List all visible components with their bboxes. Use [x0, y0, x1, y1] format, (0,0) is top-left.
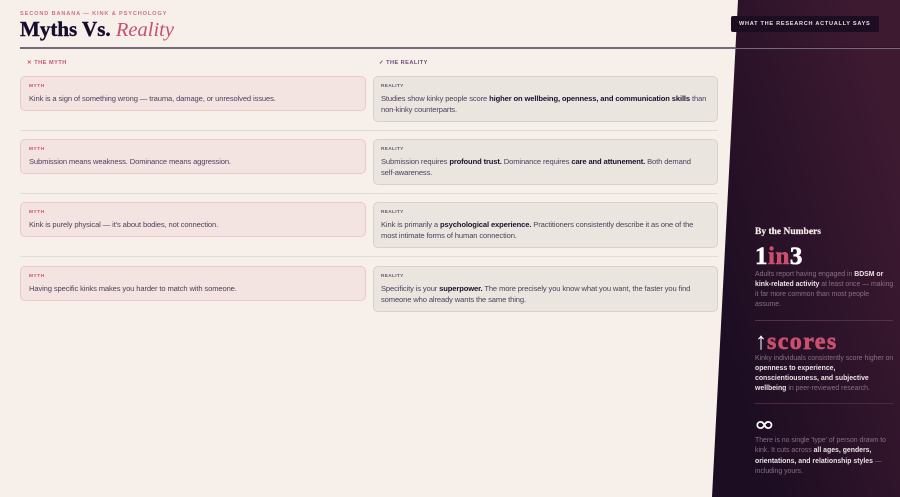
stat text 1: it far more common than most people: [755, 291, 869, 298]
myth card 4: Having specific kinks makes you harder to match with someone.: [29, 284, 237, 293]
header rule: [20, 47, 900, 49]
reality card 4: REALITY: [381, 274, 404, 279]
column header: myth: ✕ THE MYTH: [27, 60, 67, 66]
eyebrow: SECOND BANANA — KINK & PSYCHOLOGY: [20, 11, 167, 17]
stat text 1: kink-related activity at least once — making: [755, 281, 893, 288]
myth card 2: MYTH: [29, 147, 45, 152]
stat text 2: openness to experience,: [755, 365, 835, 372]
reality card 2: REALITY: [381, 147, 404, 152]
myth card 2: Submission means weakness. Dominance means aggression.: [29, 157, 231, 166]
stat: 1 in 3: 1in3: [755, 243, 803, 270]
stat text 2: conscientiousness, and subjective: [755, 375, 869, 382]
stat text 2: Kinky individuals consistently score higher on: [755, 354, 893, 362]
stat: infinity: ∞: [754, 412, 775, 436]
myth card 2: [20, 139, 366, 174]
title: Myths Vs. Reality: [20, 17, 174, 41]
stat text 3: There is no single 'type' of person drawn to: [755, 437, 886, 444]
sidebar heading: By the Numbers: [755, 227, 821, 237]
reality card 2: Submission requires profound trust. Dominance requires care and attunement. Both demand: [381, 157, 691, 166]
reality card 3: [373, 202, 718, 248]
myth card 1: MYTH: [29, 84, 45, 89]
stat text 1: [755, 270, 893, 308]
myth card 1: [20, 76, 366, 111]
stat text 3: kink. It cuts across all ages, genders,: [755, 447, 871, 454]
reality card 1: Studies show kinky people score higher on wellbeing, openness, and communication skills than: [381, 94, 706, 103]
stat text 3: [755, 436, 886, 475]
reality card 4: Specificity is your superpower. The more precisely you know what you want, the faster you find: [381, 284, 690, 293]
reality card 1: REALITY: [381, 84, 404, 89]
myth card 3: [20, 202, 366, 237]
reality card 3: REALITY: [381, 210, 404, 215]
stat text 3: orientations, and relationship styles —: [755, 458, 882, 465]
myth card 1: Kink is a sign of something wrong — trauma, damage, or unresolved issues.: [29, 94, 276, 103]
stat text 2: wellbeing in peer-reviewed research.: [755, 385, 870, 392]
stat text 1: Adults report having engaged in BDSM or: [755, 270, 883, 278]
stat text 3: including yours.: [755, 468, 803, 475]
reality card 2: self-awareness.: [381, 168, 432, 177]
myth card 4: [20, 266, 366, 301]
reality card 2: [373, 139, 718, 185]
badge: [731, 16, 879, 32]
reality card 4: someone who already wants the same thing.: [381, 295, 526, 304]
stat text 1: assume.: [755, 301, 781, 308]
reality card 1: [373, 76, 718, 122]
myth card 3: MYTH: [29, 210, 45, 215]
reality card 4: [373, 266, 718, 312]
myth card 3: Kink is purely physical — it's about bodies, not connection.: [29, 220, 218, 229]
stat: scores: ↑scores: [755, 328, 838, 355]
stat text 2: [755, 354, 893, 392]
myth card 4: MYTH: [29, 274, 45, 279]
reality card 3: most intimate forms of human connection.: [381, 231, 517, 240]
reality card 1: non-kinky counterparts.: [381, 105, 457, 114]
reality card 3: Kink is primarily a psychological experience. Practitioners consistently describe it as one of the: [381, 220, 693, 229]
column header: reality: ✓ THE REALITY: [379, 60, 428, 66]
badge: WHAT THE RESEARCH ACTUALLY SAYS: [739, 21, 871, 27]
